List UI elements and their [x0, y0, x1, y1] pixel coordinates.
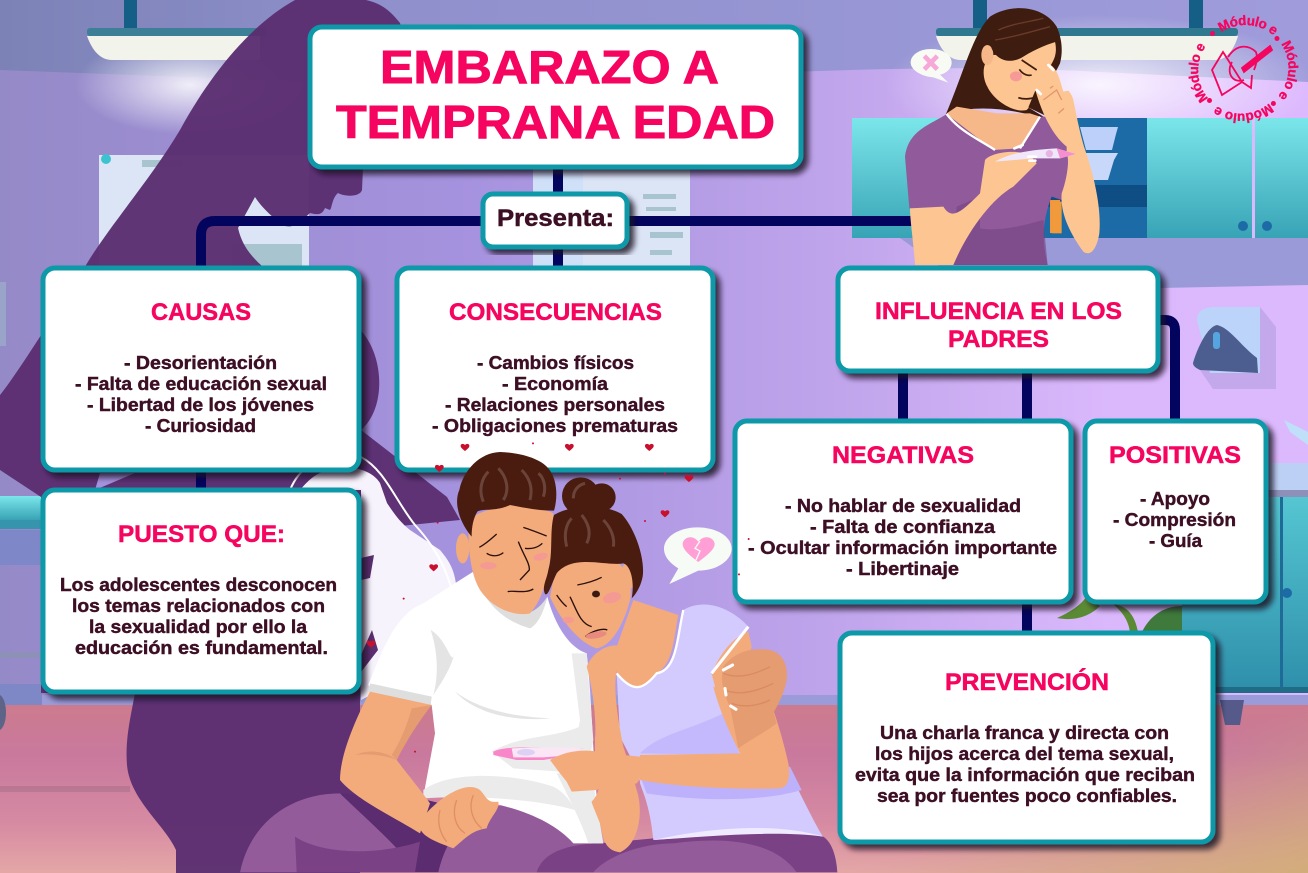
hand dryer [1193, 307, 1276, 389]
title panel: EMBARAZO A [380, 41, 719, 93]
panel: consecuencias: CONSECUENCIAS [449, 299, 662, 326]
panel: positivas: - Compresión [1113, 509, 1236, 530]
panel: positivas: POSITIVAS [1109, 442, 1241, 469]
upper cabinets [852, 118, 1308, 288]
wall poster centre [533, 166, 690, 266]
panel: prevención: PREVENCIÓN [945, 668, 1109, 696]
panel: prevención: Una charla franca y directa con [880, 722, 1169, 743]
panel: positivas: - Guía [1149, 530, 1203, 551]
panel: puesto que [43, 490, 359, 692]
panel: negativas: - Falta de confianza [810, 516, 996, 537]
panel: prevención [840, 633, 1213, 842]
counter and lower cabinets right [1182, 420, 1308, 725]
panel: causas: CAUSAS [151, 299, 251, 326]
left room details [0, 282, 42, 730]
man's left arm and fist [340, 692, 499, 848]
plant [1057, 596, 1182, 632]
panel: prevención: sea por fuentes poco confiables. [877, 785, 1177, 806]
title panel [310, 27, 801, 167]
left arm and hand [910, 152, 1037, 265]
hair front lock [991, 14, 1060, 61]
speech bubble with broken heart [664, 527, 732, 584]
shirt [905, 114, 1077, 265]
woman's neck [617, 600, 678, 687]
white dress of silhouette [290, 457, 457, 700]
face details [1010, 71, 1022, 81]
panel: influencia en los padres [838, 268, 1158, 371]
couple illustration [240, 442, 837, 872]
panel: causas: - Curiosidad [145, 415, 256, 436]
ceiling light right [885, 0, 1308, 155]
logo: Módulo e: Módulo e Módulo eMódulo eMódulo e [1188, 14, 1299, 124]
woman's head [544, 477, 643, 648]
candle/bottle below arm [1052, 202, 1062, 233]
ceiling light left [75, 0, 305, 135]
neck [947, 107, 1040, 150]
panel: prevención: los hijos acerca del tema sexual, [875, 743, 1174, 764]
title panel: TEMPRANA EDAD [336, 96, 775, 148]
presenta label [483, 194, 627, 247]
panel: consecuencias: - Cambios físicos [477, 352, 634, 373]
panel: positivas [1085, 421, 1266, 602]
presenta label: Presenta: [497, 205, 614, 232]
panel: causas [43, 268, 359, 470]
right arm and hand [1035, 63, 1100, 253]
man's head [456, 452, 556, 614]
connector lines [201, 160, 1175, 636]
face [984, 42, 1056, 111]
man's trousers [240, 793, 837, 872]
floating hearts [367, 442, 750, 753]
test stick [995, 148, 1076, 162]
arms across [617, 610, 789, 789]
panel: negativas: - No hablar de sexualidad [785, 495, 1021, 516]
panel: causas: - Libertad de los jóvenes [87, 394, 314, 415]
panel: puesto que: PUESTO QUE: [118, 521, 285, 548]
pregnancy test [493, 747, 583, 760]
panel: consecuencias: - Relaciones personales [445, 394, 665, 415]
panel: consecuencias: - Economía [502, 373, 609, 394]
panel: puesto que: educación es fundamental. [75, 637, 328, 658]
panel: causas: - Falta de educación sexual [75, 373, 327, 394]
speech bubble with X [911, 49, 952, 83]
panel: causas: - Desorientación [124, 352, 277, 373]
panel: negativas: - Libertinaje [846, 558, 959, 579]
woman's dress [617, 605, 823, 840]
nails [1014, 65, 1053, 161]
man's forearm and elbow [592, 737, 640, 852]
hair back [946, 8, 1062, 119]
panel: consecuencias [397, 268, 713, 470]
panel: negativas [735, 421, 1071, 602]
panel: puesto que: la sexualidad por ello la [89, 616, 308, 637]
silhouette of pregnant woman [0, 0, 460, 873]
panel: influencia en los padres: PADRES [948, 326, 1049, 353]
woman with pregnancy test, top right [905, 8, 1100, 265]
man's torso [368, 572, 603, 843]
panel: positivas: - Apoyo [1140, 488, 1210, 509]
panel: puesto que: los temas relacionados con [72, 595, 325, 616]
panel: negativas: - Ocultar información importante [748, 537, 1057, 558]
panel: consecuencias: - Obligaciones prematuras [432, 415, 678, 436]
panel: influencia en los padres: INFLUENCIA EN LOS [875, 298, 1122, 325]
woman's raised hand [587, 645, 632, 747]
hair seen behind hand [1028, 87, 1052, 119]
hand holding test [550, 751, 641, 792]
panel: puesto que: Los adolescentes desconocen [60, 574, 337, 595]
panel: prevención: evita que la información que reciban [855, 764, 1195, 785]
panel: negativas: NEGATIVAS [832, 442, 974, 469]
wall poster left [99, 154, 309, 268]
